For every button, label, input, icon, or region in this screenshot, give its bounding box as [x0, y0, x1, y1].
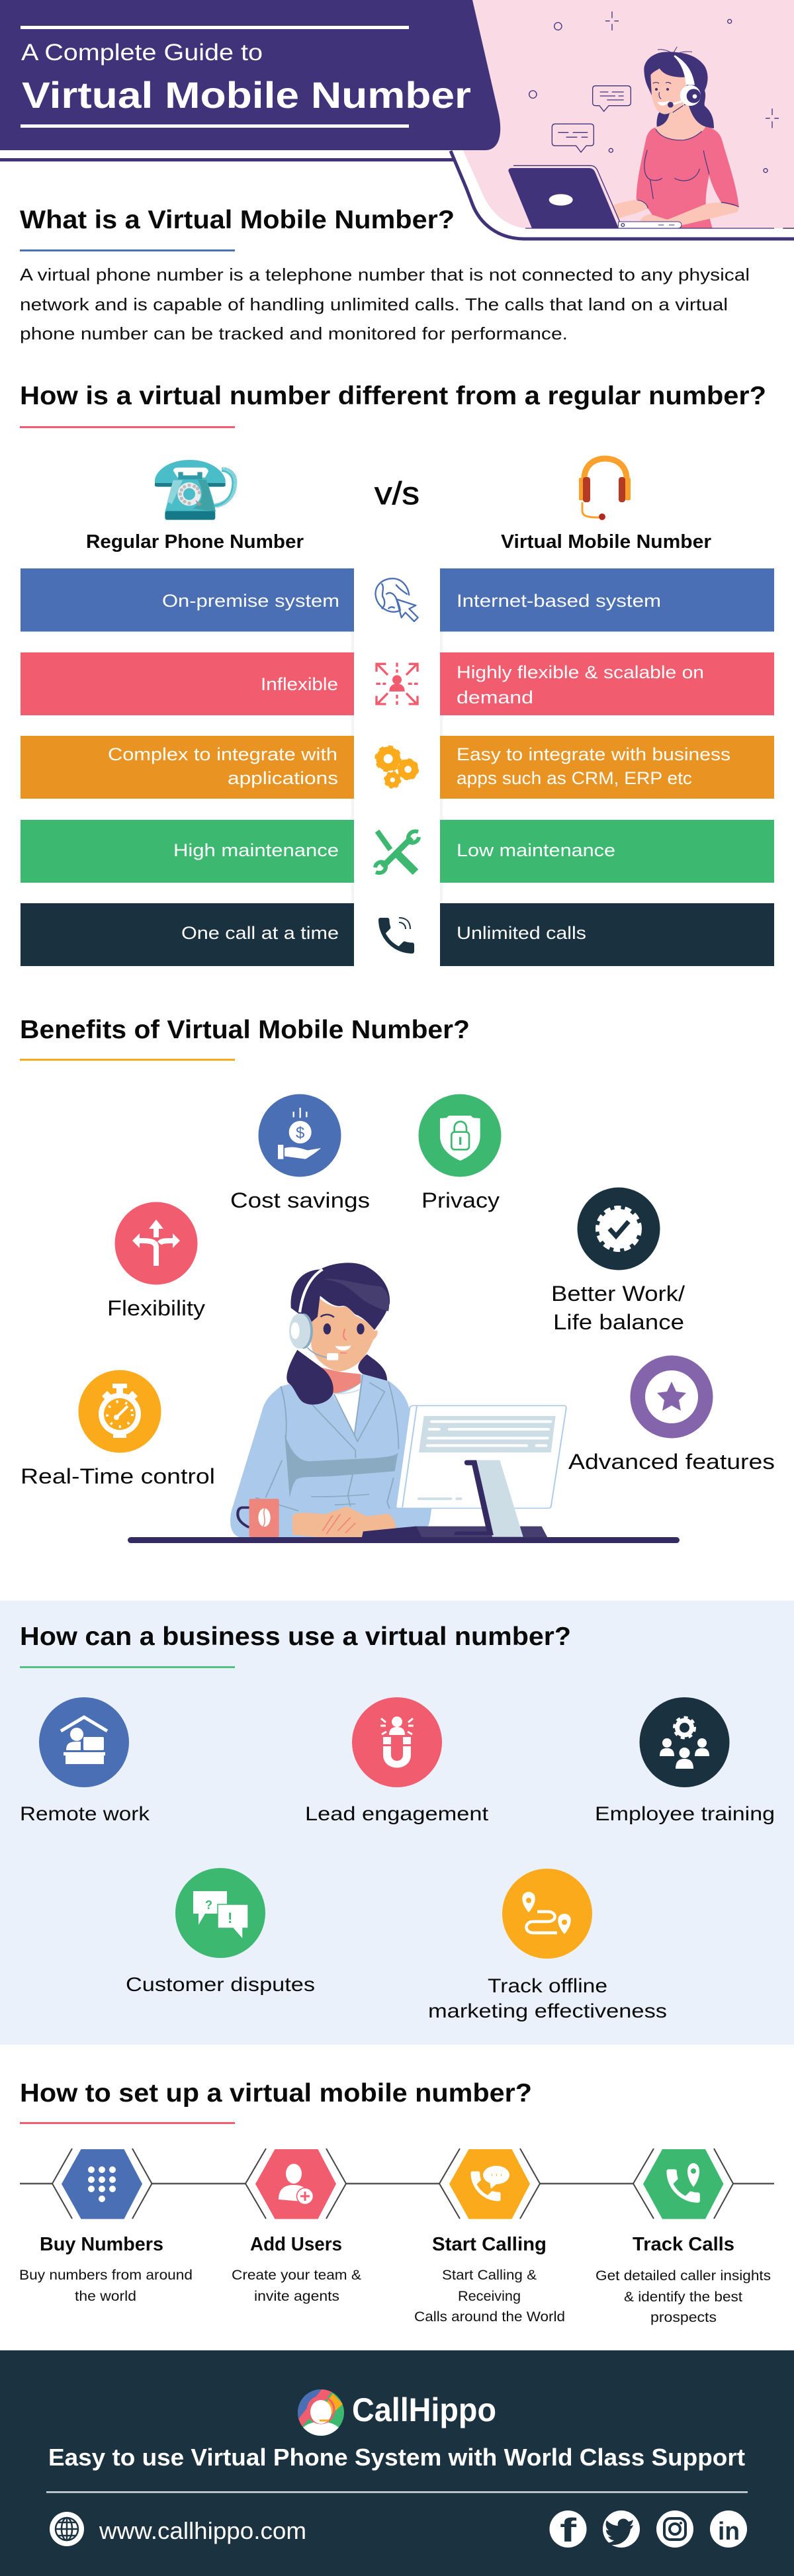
- row: integration: [21, 736, 774, 799]
- row: maintenance: [21, 820, 774, 883]
- step 3: start calling: [414, 2149, 565, 2325]
- step 4: track calls: & identify the best: [624, 2289, 742, 2305]
- step 3: start calling: Calls around the World: [414, 2309, 565, 2325]
- section: comparison: [20, 382, 774, 966]
- website: www.callhippo.com: [99, 2517, 306, 2544]
- benefit: advanced features: Advanced features: [568, 1450, 775, 1474]
- benefit: flexibility: [107, 1202, 205, 1320]
- row: integration: Easy to integrate with business: [457, 744, 730, 764]
- paragraph: A virtual phone number is a telephone number that is not connected to any physical: [20, 265, 750, 285]
- benefit: real-time control: Real-Time control: [21, 1464, 215, 1488]
- icon: CallHippo logo: [298, 2389, 344, 2436]
- step 2: add users: Create your team &: [232, 2268, 361, 2283]
- row: calls: [21, 903, 774, 966]
- footer: [0, 2350, 794, 2576]
- brand name: CallHippo: [352, 2391, 496, 2428]
- use: customer disputes: Customer disputes: [126, 1974, 315, 1996]
- connector line: [20, 2183, 774, 2184]
- row: integration: Complex to integrate with: [108, 744, 337, 764]
- heading: How can a business use a virtual number?: [20, 1622, 571, 1651]
- section: what is a virtual mobile number: [20, 206, 750, 343]
- icon: facebook: f: [560, 2512, 577, 2549]
- use: lead engagement: Lead engagement: [305, 1803, 489, 1825]
- benefit: cost savings: [230, 1094, 370, 1212]
- icon: headset: [579, 459, 631, 520]
- social icons: [549, 2510, 747, 2549]
- column heading: virtual: Virtual Mobile Number: [501, 531, 711, 553]
- step 3: start calling: Receiving: [458, 2289, 521, 2304]
- heading: What is a Virtual Mobile Number?: [20, 206, 455, 234]
- row: flexibility: Inflexible: [261, 674, 338, 694]
- section: setup steps: [19, 2079, 774, 2325]
- use: remote work: Remote work: [20, 1803, 150, 1825]
- icon: facebook: [549, 2510, 586, 2549]
- use: customer disputes: [126, 1868, 315, 1996]
- step 2: add users: [232, 2149, 361, 2304]
- row: system: Internet-based system: [457, 591, 661, 611]
- benefit: better work life balance: [551, 1187, 685, 1334]
- benefit: privacy: Privacy: [421, 1188, 500, 1212]
- title line 2: Virtual Mobile Number: [22, 74, 471, 116]
- row: maintenance: Low maintenance: [457, 840, 615, 860]
- step 1: buy numbers: Buy numbers from around: [19, 2268, 193, 2283]
- step 3: start calling: Start Calling: [432, 2234, 547, 2255]
- icon: gears: [376, 747, 418, 787]
- benefit: flexibility: Flexibility: [107, 1296, 205, 1320]
- row: integration: apps such as CRM, ERP etc: [457, 768, 692, 788]
- row: flexibility: [21, 652, 774, 715]
- icon: scaling person: [376, 663, 418, 705]
- row: calls: One call at a time: [181, 923, 339, 943]
- header banner: [0, 0, 794, 239]
- heading: Benefits of Virtual Mobile Number?: [20, 1016, 470, 1044]
- benefit: cost savings: $: [296, 1124, 304, 1142]
- step 1: buy numbers: Buy Numbers: [40, 2234, 163, 2255]
- icon: globe: [50, 2512, 84, 2546]
- row: flexibility: demand: [457, 688, 533, 707]
- paragraph: network and is capable of handling unlimited calls. The calls that land on a virtual: [20, 294, 728, 314]
- benefit: cost savings: Cost savings: [230, 1188, 370, 1212]
- icon: twitter: [603, 2510, 640, 2548]
- versus label: v/s: [375, 476, 419, 511]
- use: remote work: [20, 1697, 150, 1825]
- icon: wrench and screwdriver: [375, 831, 419, 873]
- benefit: better work life balance: Life balance: [553, 1310, 684, 1334]
- step 4: track calls: prospects: [650, 2310, 717, 2325]
- icon: rotary telephone: [155, 460, 235, 520]
- use: track offline marketing: Track offline: [488, 1975, 607, 1997]
- use: employee training: [595, 1697, 775, 1825]
- use: track offline marketing: marketing effectiveness: [428, 2000, 667, 2022]
- icon: linkedin: [710, 2510, 747, 2548]
- use: employee training: Employee training: [595, 1803, 775, 1825]
- row: calls: Unlimited calls: [457, 923, 586, 943]
- section: benefits: [20, 1016, 775, 1543]
- benefit: better work life balance: Better Work/: [551, 1282, 685, 1306]
- heading: How is a virtual number different from a regular number?: [20, 382, 766, 410]
- use: track offline marketing: [428, 1869, 667, 2022]
- icon: instagram: [656, 2510, 693, 2548]
- step 2: add users: invite agents: [254, 2289, 339, 2304]
- row: maintenance: High maintenance: [173, 840, 339, 860]
- row: integration: applications: [228, 768, 338, 788]
- tagline: Easy to use Virtual Phone System with World Class Support: [48, 2444, 745, 2471]
- row: system: [21, 568, 774, 631]
- paragraph: [20, 265, 750, 343]
- row: system: On-premise system: [162, 591, 339, 611]
- section: business uses: [0, 1601, 794, 2045]
- illustration: agent at computer: [128, 1263, 680, 1543]
- heading: How to set up a virtual mobile number?: [20, 2079, 532, 2108]
- row: flexibility: Highly flexible & scalable on: [457, 662, 704, 682]
- step 3: start calling: Start Calling &: [442, 2268, 537, 2283]
- icon: globe with cursor: [376, 578, 418, 621]
- step 1: buy numbers: the world: [75, 2289, 136, 2304]
- illustration: woman at laptop: [508, 11, 794, 228]
- benefit: real-time control: [21, 1370, 215, 1488]
- icon: phone with signal: [378, 918, 414, 954]
- icon: linkedin: in: [718, 2518, 740, 2546]
- step 4: track calls: Track Calls: [633, 2234, 734, 2255]
- benefit: advanced features: [568, 1355, 775, 1474]
- step 4: track calls: [596, 2149, 771, 2325]
- title line 1: A Complete Guide to: [21, 40, 263, 66]
- use: customer disputes: !: [228, 1910, 232, 1926]
- benefit: privacy: [418, 1094, 502, 1212]
- use: customer disputes: ?: [205, 1898, 212, 1912]
- step 1: buy numbers: [19, 2149, 193, 2304]
- paragraph: phone number can be tracked and monitored for performance.: [20, 324, 568, 343]
- step 4: track calls: Get detailed caller insights: [596, 2268, 771, 2284]
- use: lead engagement: [305, 1697, 489, 1825]
- column heading: regular: Regular Phone Number: [86, 531, 304, 553]
- step 2: add users: Add Users: [250, 2234, 342, 2255]
